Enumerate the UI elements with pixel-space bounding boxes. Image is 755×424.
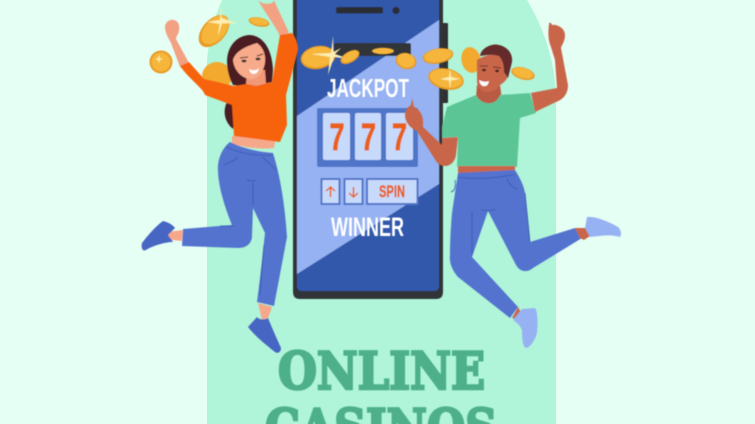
coin: right of man <box>510 65 536 82</box>
jeans seams <box>451 174 530 255</box>
face <box>233 43 265 79</box>
coin: far left <box>150 50 172 74</box>
arm: raised left <box>165 20 189 67</box>
button: up <box>322 179 340 204</box>
reel digits: 7 <box>392 117 407 159</box>
reel digits <box>330 117 407 159</box>
button: spin <box>367 179 418 204</box>
shoe: lower <box>513 308 538 348</box>
reel 1 <box>323 113 350 160</box>
ankle: lower <box>512 307 523 320</box>
coin slot <box>334 43 411 56</box>
midriff <box>232 136 276 149</box>
coin: below slot <box>394 51 418 71</box>
winner label: WINNER <box>331 212 404 242</box>
jeans seams <box>220 147 276 295</box>
speaker <box>336 7 383 14</box>
jeans <box>450 170 582 318</box>
man <box>405 23 621 348</box>
neck <box>476 85 502 108</box>
shoe: lower <box>248 317 281 353</box>
button: spin: SPIN <box>379 182 405 201</box>
coin: behind man <box>459 45 483 75</box>
reel digits: 7 <box>330 117 344 159</box>
shoe: rear <box>585 217 621 237</box>
reels panel <box>317 108 418 167</box>
shoe: rear <box>142 221 175 250</box>
midriff <box>458 166 515 174</box>
hair <box>227 35 273 87</box>
coin: right lower with sparkle <box>426 65 466 93</box>
coin: small tilted <box>338 47 362 67</box>
arm: raised right <box>258 0 289 36</box>
ankle: rear <box>575 228 590 240</box>
button: down <box>344 179 362 204</box>
woman <box>142 0 298 353</box>
camera <box>392 7 400 14</box>
screen <box>297 0 439 291</box>
reel 3 <box>386 113 413 160</box>
orange top <box>180 33 298 142</box>
arch panel <box>207 0 556 424</box>
heading: online casinos: ONLINE <box>278 342 485 402</box>
reel digits: 7 <box>361 117 376 159</box>
green shirt <box>442 93 536 167</box>
coins over the phone <box>299 36 466 93</box>
phone <box>293 0 448 299</box>
coin: small top <box>248 15 270 29</box>
coin: large tilted with sparkle <box>193 3 237 53</box>
coin: right upper <box>421 46 455 66</box>
reel 2 <box>355 113 381 160</box>
neck <box>246 70 266 88</box>
smile and eyes <box>479 66 501 86</box>
coin: behind woman <box>202 62 232 90</box>
hair <box>480 45 512 78</box>
coins behind the characters <box>150 3 536 90</box>
coin: big left with sparkle <box>299 36 349 75</box>
heading: online casinos <box>265 342 497 424</box>
face <box>477 55 509 92</box>
ankle: rear <box>167 230 183 241</box>
screen light band <box>297 20 439 274</box>
coin: in slot <box>372 48 394 54</box>
arm: pointing <box>405 98 458 166</box>
back hair <box>225 95 240 129</box>
ankle: lower <box>258 303 272 320</box>
arm: raised <box>531 23 568 112</box>
jackpot label: JACKPOT <box>327 73 409 103</box>
eyes and smile <box>240 54 263 74</box>
phone body <box>293 0 443 299</box>
side button <box>440 23 448 103</box>
jeans <box>182 142 287 306</box>
